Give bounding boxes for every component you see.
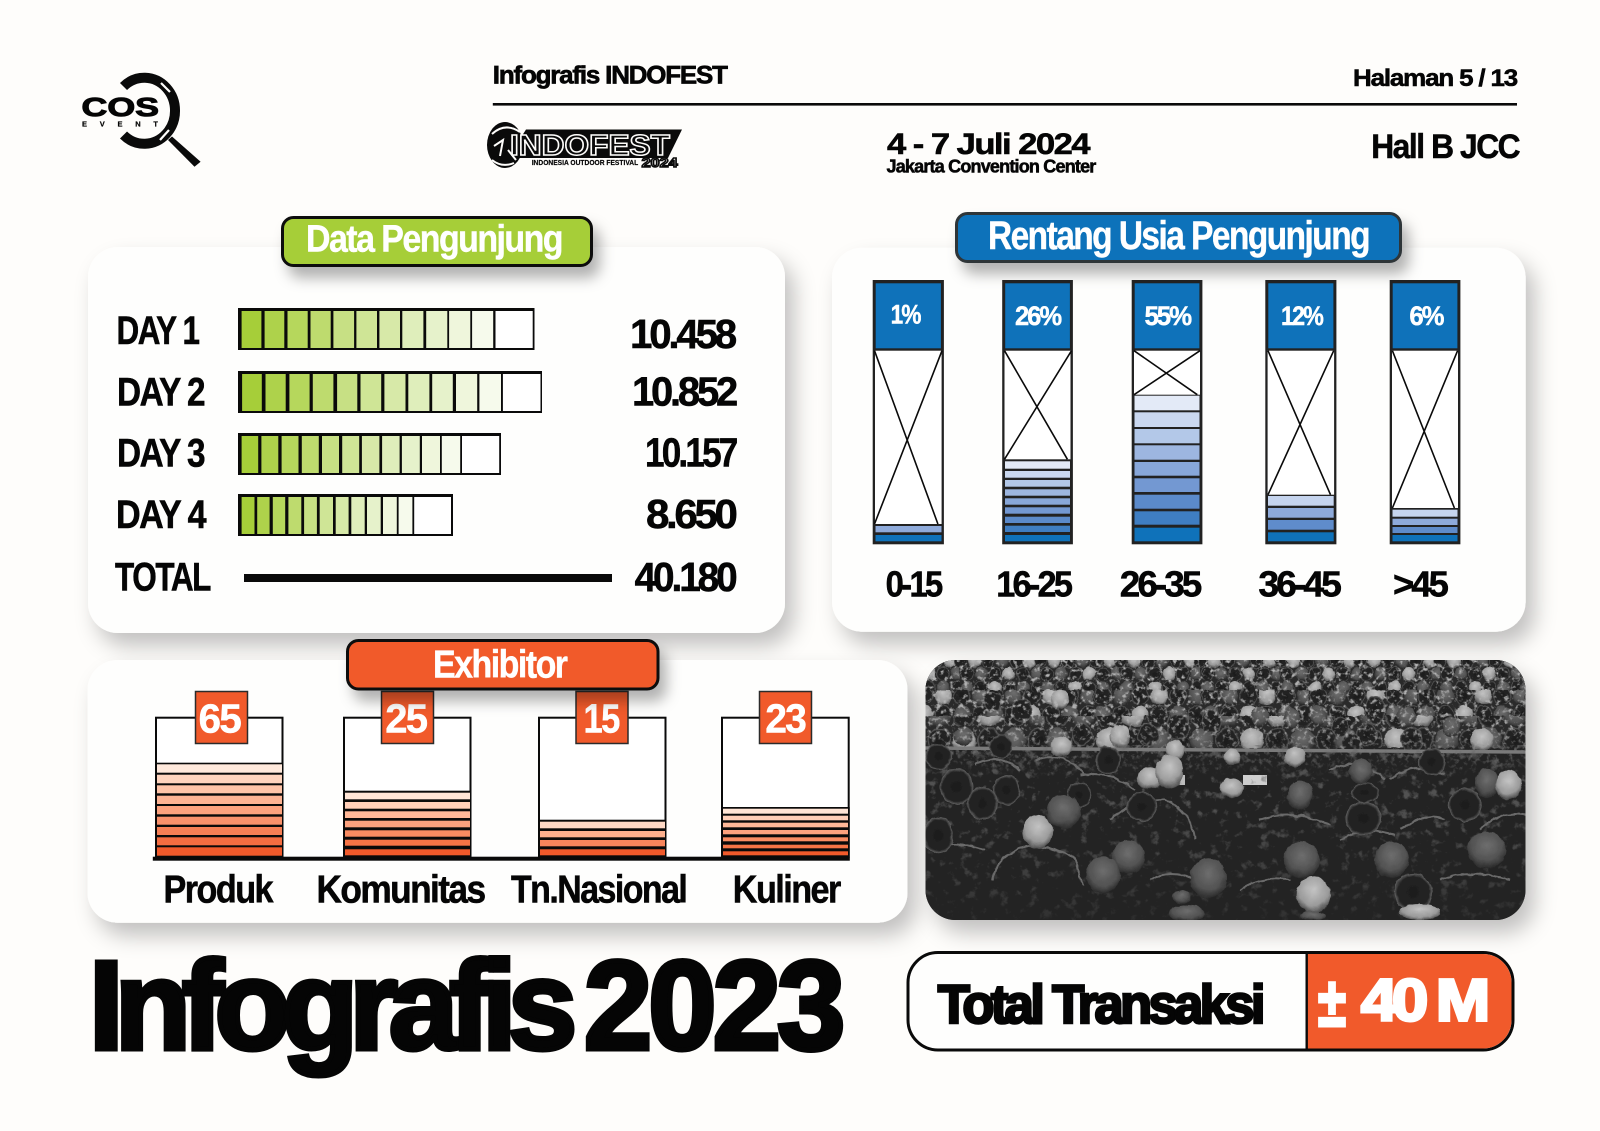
fine speckle over distant rows xyxy=(926,660,1526,774)
column: age 16-25: 16-25 xyxy=(996,564,1073,604)
column: age 0-15 xyxy=(873,280,944,604)
chart baseline xyxy=(153,857,850,861)
coarse texture over near rows xyxy=(925,745,1526,920)
column: age 0-15: 1% xyxy=(891,299,921,329)
column: age over 45: >45 xyxy=(1393,564,1449,604)
chart: Produk: 65 xyxy=(198,696,241,742)
logo: COS Event magnifier: COS xyxy=(82,92,159,122)
header: venue: Jakarta Convention Center xyxy=(886,156,1096,176)
panel: Exhibitor xyxy=(88,640,908,923)
row: day 3: 10.157 xyxy=(645,430,737,476)
header: page number: Halaman 5 / 13 xyxy=(1353,65,1518,92)
heading: Rentang Usia Pengunjung: Rentang Usia Pengunjung xyxy=(988,214,1369,258)
chart: Kuliner xyxy=(721,692,850,912)
panel: Data Pengunjung xyxy=(88,218,785,633)
title: Infografis 2023: Infografis xyxy=(89,935,572,1076)
column: age 36-45 xyxy=(1258,280,1342,604)
row: day 4 xyxy=(116,491,737,537)
logo: INDOFEST 2024: INDOFEST xyxy=(510,130,670,162)
header rule xyxy=(493,103,1517,106)
title: Infografis 2023 xyxy=(89,935,842,1076)
column: age 26-35: 26-35 xyxy=(1120,564,1202,604)
row: total: TOTAL xyxy=(115,556,211,600)
column: age over 45 xyxy=(1390,280,1460,604)
photo: seated crowd seen from behind xyxy=(920,655,1531,922)
row: day 4: 8.650 xyxy=(646,491,737,537)
row: day 2: 10.852 xyxy=(632,369,737,415)
chart: Tn.Nasional: Tn.Nasional xyxy=(511,869,686,912)
callout: Total Transaksi: Total Transaksi xyxy=(938,973,1262,1035)
row: day 4: DAY 4 xyxy=(116,493,207,537)
logo: COS Event magnifier xyxy=(82,78,201,167)
row: day 2 xyxy=(117,369,737,415)
chart: Tn.Nasional: 15 xyxy=(584,696,620,742)
callout: Total Transaksi: ± xyxy=(1318,963,1346,1041)
row: day 2: DAY 2 xyxy=(117,371,204,415)
row: day 3: DAY 3 xyxy=(117,432,204,476)
column: age 26-35: 55% xyxy=(1144,301,1192,331)
heading: Exhibitor: Exhibitor xyxy=(433,644,568,687)
row: day 1: DAY 1 xyxy=(116,309,200,353)
logo: INDOFEST 2024: 2024 xyxy=(642,155,679,170)
heading: Data Pengunjung: Data Pengunjung xyxy=(306,219,562,261)
header: hall: Hall B JCC xyxy=(1371,128,1520,166)
chart: Komunitas xyxy=(316,692,485,912)
row: day 3 xyxy=(117,430,737,476)
panel card xyxy=(88,247,785,633)
chart: Kuliner: Kuliner xyxy=(733,869,841,912)
chart: Tn.Nasional xyxy=(511,692,686,912)
header: document title: Infografis INDOFEST xyxy=(493,61,728,89)
chart: Produk: Produk xyxy=(164,869,274,912)
logo: COS Event magnifier: EVENT xyxy=(82,120,158,128)
panel card xyxy=(832,248,1526,632)
row: total xyxy=(115,554,737,600)
column: age 16-25 xyxy=(996,280,1073,604)
chart: Komunitas: 25 xyxy=(385,696,427,742)
row: total: 40.180 xyxy=(635,554,737,600)
logo: INDOFEST 2024: INDONESIA OUTDOOR FESTIVAL xyxy=(532,158,639,167)
chart: Kuliner: 23 xyxy=(765,696,806,742)
chart: Produk xyxy=(155,692,284,912)
callout: Total Transaksi xyxy=(908,952,1513,1050)
header: event date: 4 - 7 Juli 2024 xyxy=(887,128,1091,161)
column: age over 45: 6% xyxy=(1409,301,1444,331)
row: day 1 xyxy=(116,308,736,357)
panel card xyxy=(88,660,908,923)
column: age 26-35 xyxy=(1120,280,1202,604)
heading: Exhibitor xyxy=(348,640,658,689)
column: age 36-45: 36-45 xyxy=(1258,564,1342,604)
title: Infografis 2023: 2023 xyxy=(584,935,842,1076)
panel: Rentang Usia Pengunjung xyxy=(832,214,1526,632)
callout: Total Transaksi: 40 M xyxy=(1361,968,1487,1034)
logo: INDOFEST 2024 xyxy=(487,122,682,170)
row: day 1: 10.458 xyxy=(630,311,736,357)
column: age 16-25: 26% xyxy=(1015,301,1062,331)
chart: Komunitas: Komunitas xyxy=(316,869,485,912)
column: age 36-45: 12% xyxy=(1281,301,1324,331)
column: age 0-15: 0-15 xyxy=(886,564,943,604)
